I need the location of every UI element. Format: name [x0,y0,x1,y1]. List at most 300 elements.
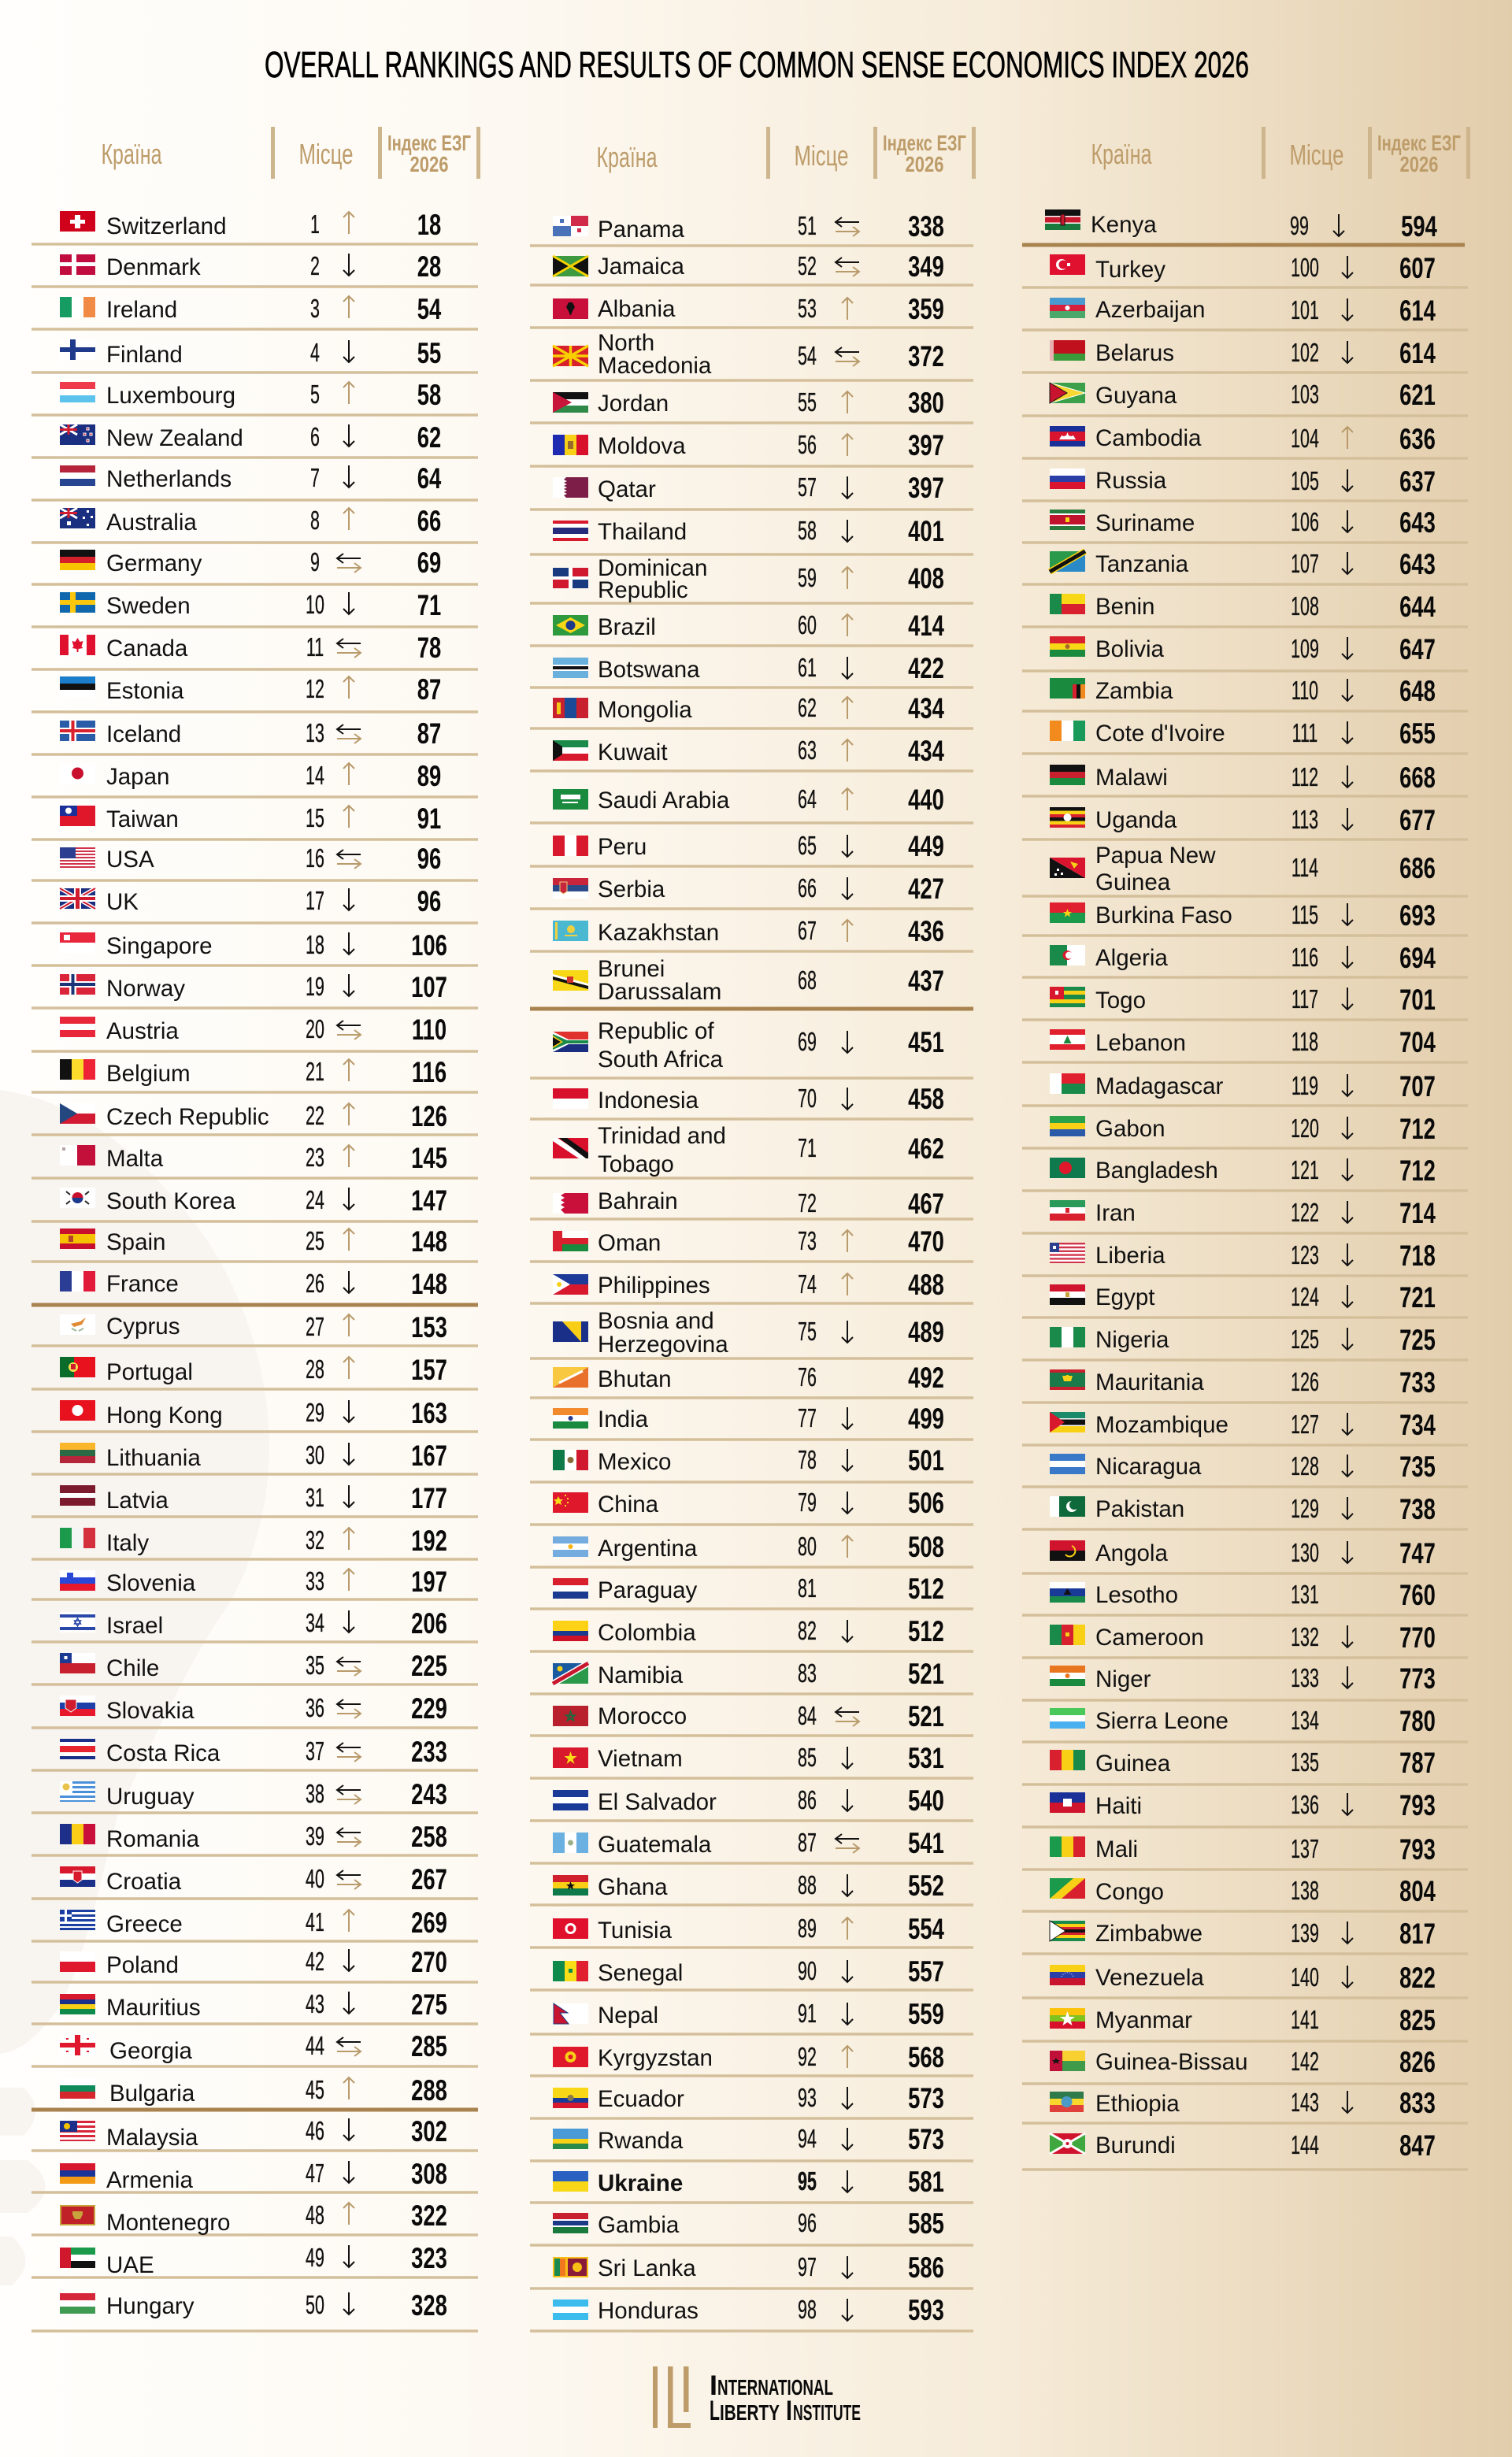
row: Vietnam: Vietnam [598,1746,683,1772]
row: Kuwait: 63 [798,736,817,765]
row: Croatia [60,1863,447,1896]
row: Republic of South Africa: 69 [798,1027,817,1056]
row: Republic of South Africa: South Africa [598,1047,724,1073]
row: Lesotho: 131 [1291,1580,1319,1609]
flag: Georgia [60,2035,95,2055]
row: Sri Lanka [553,2251,944,2284]
row: Guinea: 135 [1291,1747,1319,1777]
row: Montenegro: 322 [411,2199,447,2232]
header: column 2: Країна [597,141,658,173]
row: Ecuador: 93 [798,2083,817,2112]
row: Cote d'Ivoire: 111 [1292,718,1317,747]
row: Tunisia: Tunisia [598,1918,673,1944]
row: Azerbaijan: Azerbaijan [1095,297,1205,323]
row: Georgia: 44 [306,2031,324,2060]
row: Papua New Guinea: Guinea [1095,869,1171,895]
row: Zimbabwe [1050,1918,1436,1950]
flag: El Salvador [553,1790,588,1810]
row: Serbia: Serbia [598,876,665,902]
row: Malawi: 668 [1399,762,1436,794]
row: Switzerland: Switzerland [106,213,226,239]
row: Jordan: 55 [798,387,817,417]
flag: Canada [60,635,95,655]
row: Niger: Niger [1095,1666,1151,1692]
row: Germany: 69 [417,547,441,579]
flag: Uganda [1050,807,1085,828]
row: Peru: 65 [798,831,817,860]
row: Kazakhstan: 67 [798,916,817,945]
flag: Colombia [553,1621,588,1641]
row: Singapore: 106 [411,929,447,962]
row: Guatemala: 87 [798,1828,817,1857]
row: Chile [60,1650,447,1682]
row: Sweden: 71 [417,589,441,621]
row: Czech Republic: 22 [306,1101,324,1130]
flag: Portugal [60,1357,95,1377]
row: UAE: UAE [106,2252,154,2278]
row: Slovenia [60,1566,447,1598]
row: India: 77 [798,1403,817,1432]
header: column 1: Місце [299,138,353,170]
row: Vietnam: 531 [908,1742,944,1774]
row: Mali [1050,1833,1436,1866]
row: Hong Kong: Hong Kong [106,1403,223,1429]
flag: Argentina [553,1536,588,1557]
row: Myanmar: Myanmar [1095,2007,1192,2033]
row: Bhutan: 76 [798,1362,817,1392]
row: Burundi: 144 [1291,2130,1319,2159]
row: Germany: 9 [310,547,320,576]
row: Austria [60,1014,447,1046]
row: Sierra Leone: Sierra Leone [1095,1708,1228,1734]
row: Armenia [60,2158,447,2193]
header: column 3 [1091,127,1470,179]
row: Algeria [1050,942,1436,974]
flag: Indonesia [553,1088,588,1109]
flag: Brunei Darussalam [553,970,588,991]
flag: Turkey [1050,254,1085,275]
row: Slovakia [60,1692,447,1725]
row: Liberia: 123 [1291,1240,1319,1269]
row: Algeria: Algeria [1095,945,1168,971]
row: Myanmar [1050,2004,1436,2036]
row: Austria: 110 [412,1014,447,1046]
row: Indonesia [553,1083,944,1115]
row: New Zealand [60,421,441,454]
row: Namibia: 521 [908,1658,944,1690]
row: Canada: 78 [417,632,441,664]
row: Malaysia: 302 [411,2115,447,2148]
flag: Sri Lanka [553,2257,588,2277]
row: Denmark: 28 [417,250,441,283]
row: Zambia: 110 [1292,676,1318,705]
flag: Ethiopia [1050,2092,1084,2112]
row: Angola: 130 [1291,1538,1319,1567]
flag: Panama [553,216,588,236]
row: Madagascar: 119 [1292,1071,1318,1100]
row: Greece [60,1907,447,1939]
row: New Zealand: New Zealand [106,425,243,451]
row: Guinea: Guinea [1095,1751,1171,1777]
row: Tanzania [1050,548,1436,580]
row: Colombia [553,1615,944,1647]
row: Congo [1050,1875,1436,1907]
flag: Senegal [553,1961,588,1981]
flag: Taiwan [60,806,95,826]
row: Portugal: 157 [411,1354,447,1386]
row: Armenia: 308 [411,2158,447,2190]
row: El Salvador: 540 [908,1784,944,1817]
row: New Zealand: 62 [417,421,441,454]
row: Jamaica: 349 [908,250,944,283]
row: Turkey [1050,252,1436,284]
row: Singapore: 18 [306,930,324,959]
row: Australia [60,505,441,537]
row: Ukraine [553,2166,944,2198]
row: Lesotho: 760 [1399,1579,1436,1611]
flag: UK [60,888,95,909]
row: Gambia [553,2207,944,2240]
flag: Latvia [60,1485,95,1506]
row: Colombia: 512 [908,1615,944,1647]
row: Kenya [1045,209,1437,243]
row: Lebanon: 704 [1399,1026,1436,1058]
row: Sweden: 10 [306,590,324,619]
flag: Russia [1050,469,1085,489]
row: Poland: Poland [106,1952,179,1978]
row: Mali: 793 [1399,1833,1436,1866]
row: Luxembourg [60,379,441,411]
row: Japan [60,760,441,792]
row: Canada: Canada [106,636,188,662]
row: Mexico [553,1444,944,1477]
row: Cameroon [1050,1621,1436,1654]
flag: Togo [1050,987,1085,1007]
row: Iran: 714 [1399,1197,1436,1229]
row: Kenya: 594 [1401,210,1437,243]
flag: Guinea [1050,1750,1085,1770]
row: Tunisia: 554 [908,1913,944,1945]
row: Morocco [553,1700,944,1732]
row: Guinea: 787 [1399,1747,1436,1779]
flag: Angola [1050,1540,1085,1561]
row: Venezuela: 140 [1291,1962,1319,1992]
row: South Korea [60,1184,447,1217]
row: Egypt: 124 [1291,1282,1319,1311]
row: Austria: Austria [106,1018,179,1044]
flag: Hungary [60,2293,95,2314]
flag: Burkina Faso [1050,902,1085,923]
row: Brunei Darussalam: 68 [798,965,817,995]
row: Belgium [60,1056,447,1088]
row: Norway: 19 [306,972,324,1001]
row: Uganda: Uganda [1095,807,1177,833]
row: Tunisia [553,1913,944,1945]
row: Portugal: Portugal [106,1359,193,1385]
row: North Macedonia: 54 [798,341,817,370]
row: Dominican Republic: 408 [908,562,944,595]
flag: Mauritius [60,1994,95,2014]
row: Ireland: 3 [310,294,320,323]
row: Jamaica: Jamaica [598,254,684,280]
logo text: I [786,2396,792,2426]
flag: Guyana [1050,383,1085,403]
flag: Bangladesh [1050,1158,1085,1178]
row: Nicaragua: 735 [1399,1451,1436,1483]
row: Jordan: 380 [908,387,944,419]
row: Paraguay: 81 [798,1573,817,1603]
flag: Tunisia [553,1918,588,1939]
row: Mozambique: Mozambique [1095,1412,1228,1438]
logo: International Liberty Institute [653,2366,861,2428]
flag: Congo [1050,1878,1085,1899]
flag: Benin [1050,594,1085,614]
row: Trinidad and Tobago [553,1123,944,1177]
row: China: 79 [798,1488,817,1517]
logo text: L [710,2396,720,2426]
row: Colombia: Colombia [598,1620,696,1646]
row: Lithuania: Lithuania [106,1445,201,1471]
row: Hungary: 328 [411,2289,447,2322]
flag: Uruguay [60,1781,95,1802]
row: Ghana: 552 [908,1870,944,1902]
row: Mongolia: 434 [908,692,944,724]
flag: Switzerland [60,211,95,232]
row: Brunei Darussalam: Darussalam [598,979,721,1005]
row: Gambia: 585 [908,2207,944,2240]
row: Botswana: 422 [908,652,944,684]
row: Estonia [60,673,441,706]
flag: Tanzania [1050,551,1085,572]
flag: Belarus [1050,340,1085,361]
row: Kazakhstan: 436 [908,915,944,947]
row: Estonia: 12 [306,674,324,703]
row: Republic of South Africa: 451 [908,1026,944,1058]
row: Moldova: 397 [908,429,944,461]
row: Egypt: 721 [1399,1281,1436,1314]
row: Ethiopia: 833 [1399,2087,1436,2119]
row: Oman: 470 [908,1225,944,1258]
row: Bosnia and Herzegovina: 489 [908,1316,944,1348]
row: Iran: 122 [1291,1198,1319,1227]
row: Saudi Arabia [553,784,944,816]
flag: Slovakia [60,1695,95,1716]
row: Mongolia: 62 [798,693,817,722]
flag: Guinea-Bissau [1050,2051,1085,2071]
flag: Mongolia [553,698,588,718]
row: Mauritania [1050,1366,1436,1399]
row: North Macedonia: Macedonia [598,353,712,379]
row: Kenya: 99 [1290,211,1309,240]
row: Armenia: 47 [306,2159,324,2188]
row: Nepal [553,1998,944,2030]
row: Bulgaria: Bulgaria [109,2081,195,2107]
row: Hungary: Hungary [106,2293,195,2319]
row: France: 148 [411,1268,447,1300]
row: Albania: Albania [598,296,676,322]
row: Finland [60,337,441,369]
row: Estonia: Estonia [106,678,184,704]
row: Italy [60,1525,447,1557]
rows: column 3 [1045,209,1437,2162]
row: South Korea: South Korea [106,1188,236,1214]
row: Madagascar [1050,1070,1436,1102]
row: New Zealand: 6 [310,422,320,451]
row: Mauritius: Mauritius [106,1995,201,2021]
row: Estonia: 87 [417,673,441,706]
row: Iceland: 13 [306,718,324,747]
row: Mauritius: 43 [306,1989,324,2018]
panel: column 2 ranks 51-98 [553,127,976,2326]
row: Paraguay: 512 [908,1573,944,1605]
row: Saudi Arabia: Saudi Arabia [598,788,730,813]
row: Nicaragua: Nicaragua [1095,1454,1202,1480]
row: Angola: 747 [1399,1537,1436,1569]
flag: Cote d'Ivoire [1050,721,1085,741]
row: Burkina Faso: Burkina Faso [1095,902,1232,928]
row: Kuwait: 434 [908,735,944,767]
row: Lesotho: Lesotho [1095,1582,1178,1608]
background shape [0,1090,269,2285]
row: Ireland [60,293,441,325]
row: Guinea-Bissau: 826 [1399,2046,1436,2078]
row: Pakistan: Pakistan [1095,1496,1184,1522]
row: Papua New Guinea: 114 [1292,853,1318,882]
row: Oman: 73 [798,1226,817,1255]
header: column 1: Країна [101,138,162,170]
row: Bahrain: Bahrain [598,1188,678,1214]
flag: Gabon [1050,1116,1085,1136]
row: Bulgaria: 288 [411,2074,447,2107]
row: Uganda: 113 [1292,805,1318,834]
row: Nigeria: 725 [1399,1324,1436,1356]
row: Botswana: Botswana [598,657,700,683]
icon: ILI logo mark [653,2366,691,2428]
flag: Malta [60,1145,95,1166]
flag: Zambia [1050,678,1085,699]
row: Namibia: Namibia [598,1662,684,1688]
row: Saudi Arabia: 64 [798,784,817,813]
row: Ireland: 54 [417,293,441,325]
row: Philippines: Philippines [598,1273,710,1299]
row: Latvia: 177 [411,1482,447,1514]
flag: Niger [1050,1666,1085,1686]
row: Mozambique [1050,1409,1436,1441]
row: Mauritania: 126 [1291,1367,1319,1396]
header: column 1: Індекс ЕЗГ [387,131,471,155]
row: Costa Rica: 37 [306,1736,324,1766]
row: Argentina [553,1531,944,1563]
row: Mexico: 501 [908,1444,944,1477]
row: Rwanda [553,2123,944,2155]
row: Algeria: 116 [1292,943,1318,972]
row: Niger: 133 [1291,1663,1319,1692]
flag: Oman [553,1231,588,1251]
row: Venezuela: Venezuela [1095,1965,1204,1991]
flag: Sierra Leone [1050,1708,1085,1729]
row: UK [60,885,441,917]
row: Malaysia: 46 [306,2116,324,2145]
row: Senegal: 90 [798,1956,817,1985]
row: Portugal [60,1354,447,1386]
flag: Serbia [553,878,588,899]
row: Hong Kong: 29 [306,1398,324,1427]
flag: Kyrgyzstan [553,2047,588,2067]
row: Romania: Romania [106,1826,200,1852]
row: Dominican Republic [553,555,944,603]
row: Ethiopia [1050,2087,1436,2119]
row: Nepal: Nepal [598,2003,658,2029]
row: Moldova [553,429,944,461]
row: Paraguay [553,1573,944,1605]
row: Serbia: 66 [798,873,817,902]
row: Bosnia and Herzegovina: 75 [798,1317,817,1346]
row: Madagascar: Madagascar [1095,1073,1224,1099]
header: column 2: Місце [794,139,849,172]
flag: Kuwait [553,740,588,761]
header: column 2: 2026 [906,152,943,176]
row: Vietnam [553,1742,944,1774]
row: Gabon: Gabon [1095,1116,1166,1142]
logo text: I [710,2370,717,2401]
flag: Liberia [1050,1243,1085,1263]
row: Guyana: 621 [1399,379,1436,411]
row: Spain [60,1225,447,1258]
row: Panama: 338 [908,210,944,243]
flag: France [60,1271,95,1292]
row: Lebanon: 118 [1292,1027,1318,1056]
row: Kyrgyzstan [553,2041,944,2073]
flag: Botswana [553,658,588,678]
row: Ecuador: 573 [908,2082,944,2114]
flag: Bhutan [553,1367,588,1388]
row: Armenia: Armenia [106,2167,193,2193]
row: France: France [106,1271,179,1297]
row: Guatemala: 541 [908,1827,944,1859]
row: Congo: 138 [1291,1876,1319,1905]
flag: Azerbaijan [1050,298,1085,318]
row: Gambia: Gambia [598,2212,680,2238]
row: Latvia [60,1482,447,1514]
row: Switzerland: 1 [310,209,320,239]
row: Albania: 359 [908,293,944,325]
flag: Saudi Arabia [553,789,588,810]
row: Uganda [1050,804,1436,836]
row: Jordan [553,387,944,419]
flag: Israel [60,1612,95,1632]
flag: Lesotho [1050,1582,1085,1603]
row: Romania: 258 [411,1821,447,1853]
row: Malaysia [60,2115,447,2151]
header: column 3: Країна [1091,138,1152,170]
row: Pakistan: 129 [1291,1494,1319,1523]
row: Mauritania: Mauritania [1095,1369,1204,1395]
flag: Pakistan [1050,1496,1085,1517]
row: Tanzania: Tanzania [1095,551,1189,577]
row: Uruguay: 243 [411,1778,447,1810]
row: Zambia: Zambia [1095,678,1173,704]
row: Montenegro [60,2199,447,2236]
row: Sierra Leone [1050,1705,1436,1737]
flag: UAE [60,2248,95,2268]
row: Israel: Israel [106,1613,163,1639]
row: Belarus [1050,337,1436,369]
flag: Ireland [60,297,95,317]
row: Thailand: 58 [798,516,817,545]
rows: column 1 [60,209,447,2322]
row: Burundi: Burundi [1095,2133,1176,2159]
row: Uruguay: Uruguay [106,1784,195,1810]
